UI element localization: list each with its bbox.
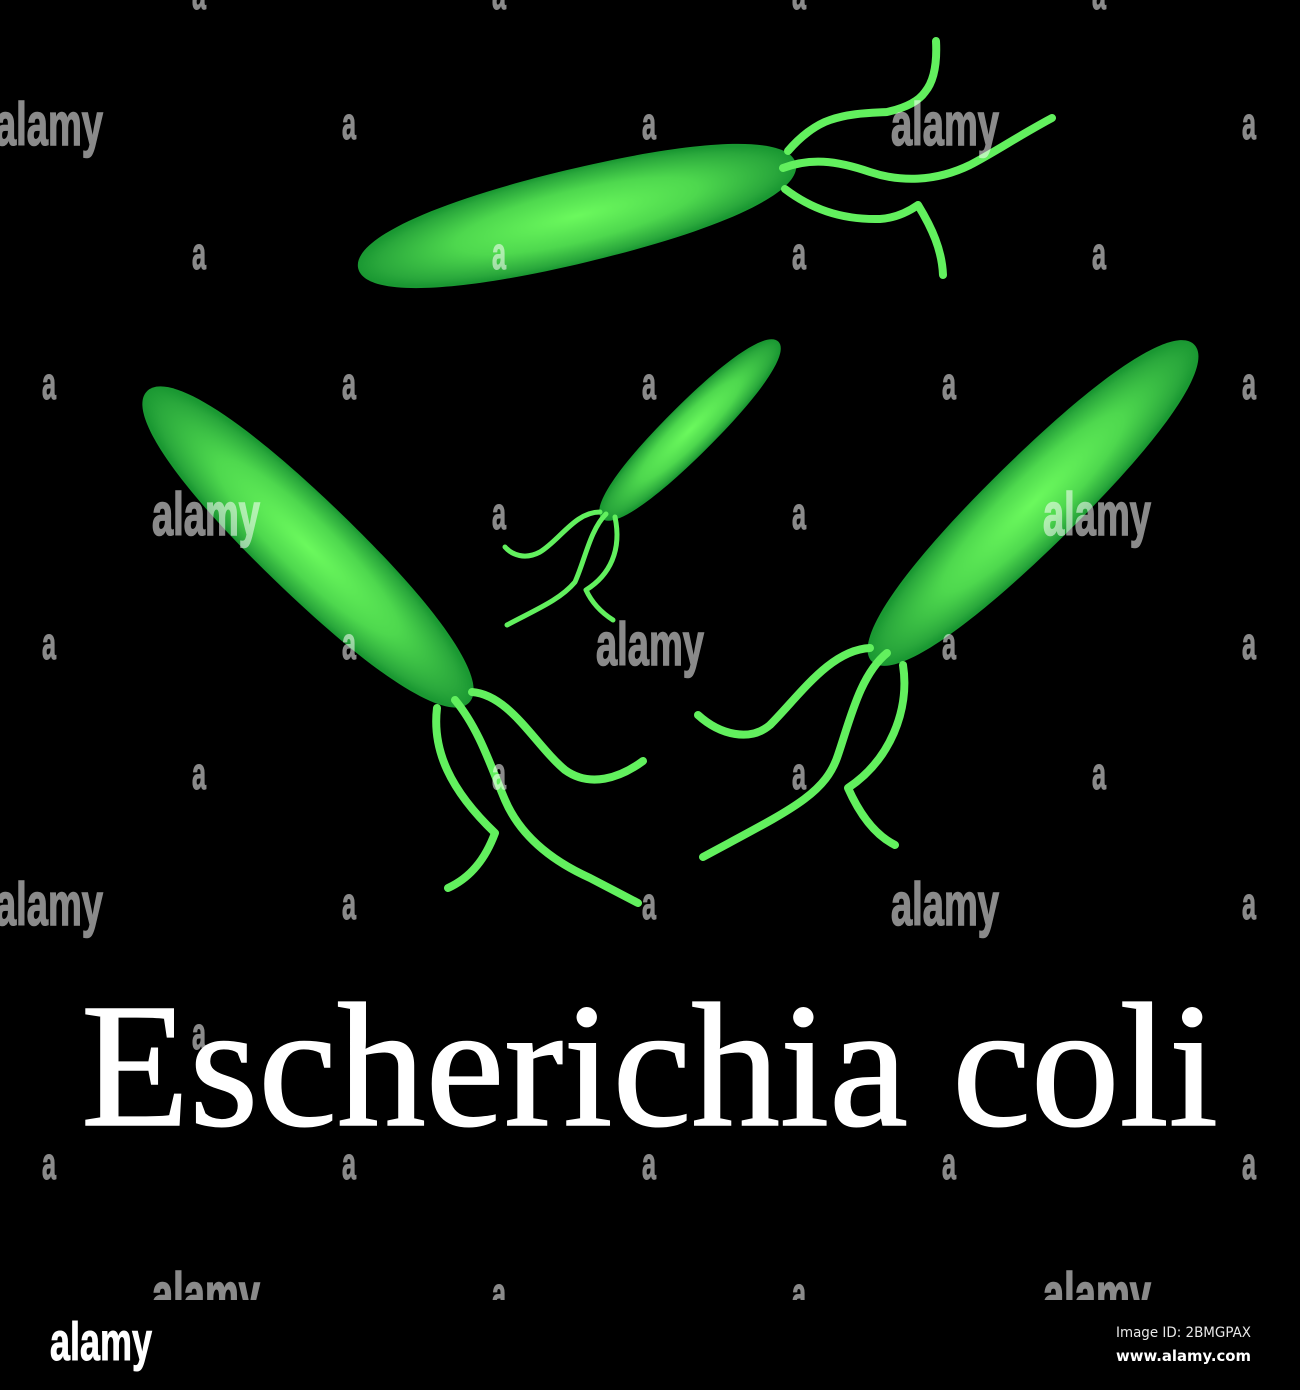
watermark pattern: a — [942, 618, 957, 669]
watermark pattern: a — [792, 488, 807, 539]
watermark pattern: a — [42, 358, 57, 409]
watermark pattern: a — [342, 618, 357, 669]
watermark pattern: alamy — [152, 1261, 260, 1328]
watermark pattern: a — [1242, 358, 1257, 409]
watermark pattern: alamy — [891, 871, 999, 938]
bacterium: top — [347, 41, 1052, 314]
watermark pattern: a — [792, 1268, 807, 1319]
watermark pattern: alamy — [1043, 481, 1151, 548]
watermark pattern: alamy — [152, 481, 260, 548]
watermark pattern: a — [42, 618, 57, 669]
bacterium: small centre — [505, 324, 796, 625]
watermark pattern: a — [42, 1138, 57, 1189]
watermark pattern: a — [942, 358, 957, 409]
image id: Image ID: 2BMGPAX — [1116, 1325, 1251, 1341]
website: www.alamy.com — [1116, 1347, 1251, 1365]
watermark pattern: a — [642, 358, 657, 409]
bacterium: right — [698, 312, 1226, 857]
watermark pattern: a — [192, 1008, 207, 1059]
watermark pattern: a — [1242, 618, 1257, 669]
watermark pattern: alamy — [0, 91, 103, 158]
watermark pattern: a — [342, 878, 357, 929]
watermark pattern: a — [792, 748, 807, 799]
watermark pattern: a — [342, 98, 357, 149]
watermark pattern: a — [1242, 98, 1257, 149]
watermark pattern: a — [192, 748, 207, 799]
watermark pattern: a — [492, 228, 507, 279]
watermark pattern: a — [942, 1138, 957, 1189]
watermark pattern: alamy — [0, 871, 103, 938]
watermark pattern: a — [792, 228, 807, 279]
watermark pattern: a — [492, 1268, 507, 1319]
watermark pattern: a — [642, 878, 657, 929]
watermark pattern: alamy — [596, 611, 704, 678]
logo: alamy: alamy — [50, 1312, 152, 1372]
watermark pattern: a — [192, 228, 207, 279]
watermark pattern: a — [1242, 878, 1257, 929]
watermark pattern: alamy — [1043, 1261, 1151, 1328]
title: Escherichia coli — [81, 968, 1218, 1164]
bacterium: left — [114, 358, 643, 903]
watermark pattern: a — [1092, 228, 1107, 279]
watermark pattern: a — [1242, 1138, 1257, 1189]
watermark pattern: a — [1092, 748, 1107, 799]
watermark pattern: a — [342, 358, 357, 409]
watermark pattern: a — [492, 488, 507, 539]
watermark pattern: a — [642, 1138, 657, 1189]
watermark pattern: alamy — [891, 91, 999, 158]
watermark pattern: a — [342, 1138, 357, 1189]
watermark pattern: a — [492, 748, 507, 799]
watermark pattern: a — [642, 98, 657, 149]
